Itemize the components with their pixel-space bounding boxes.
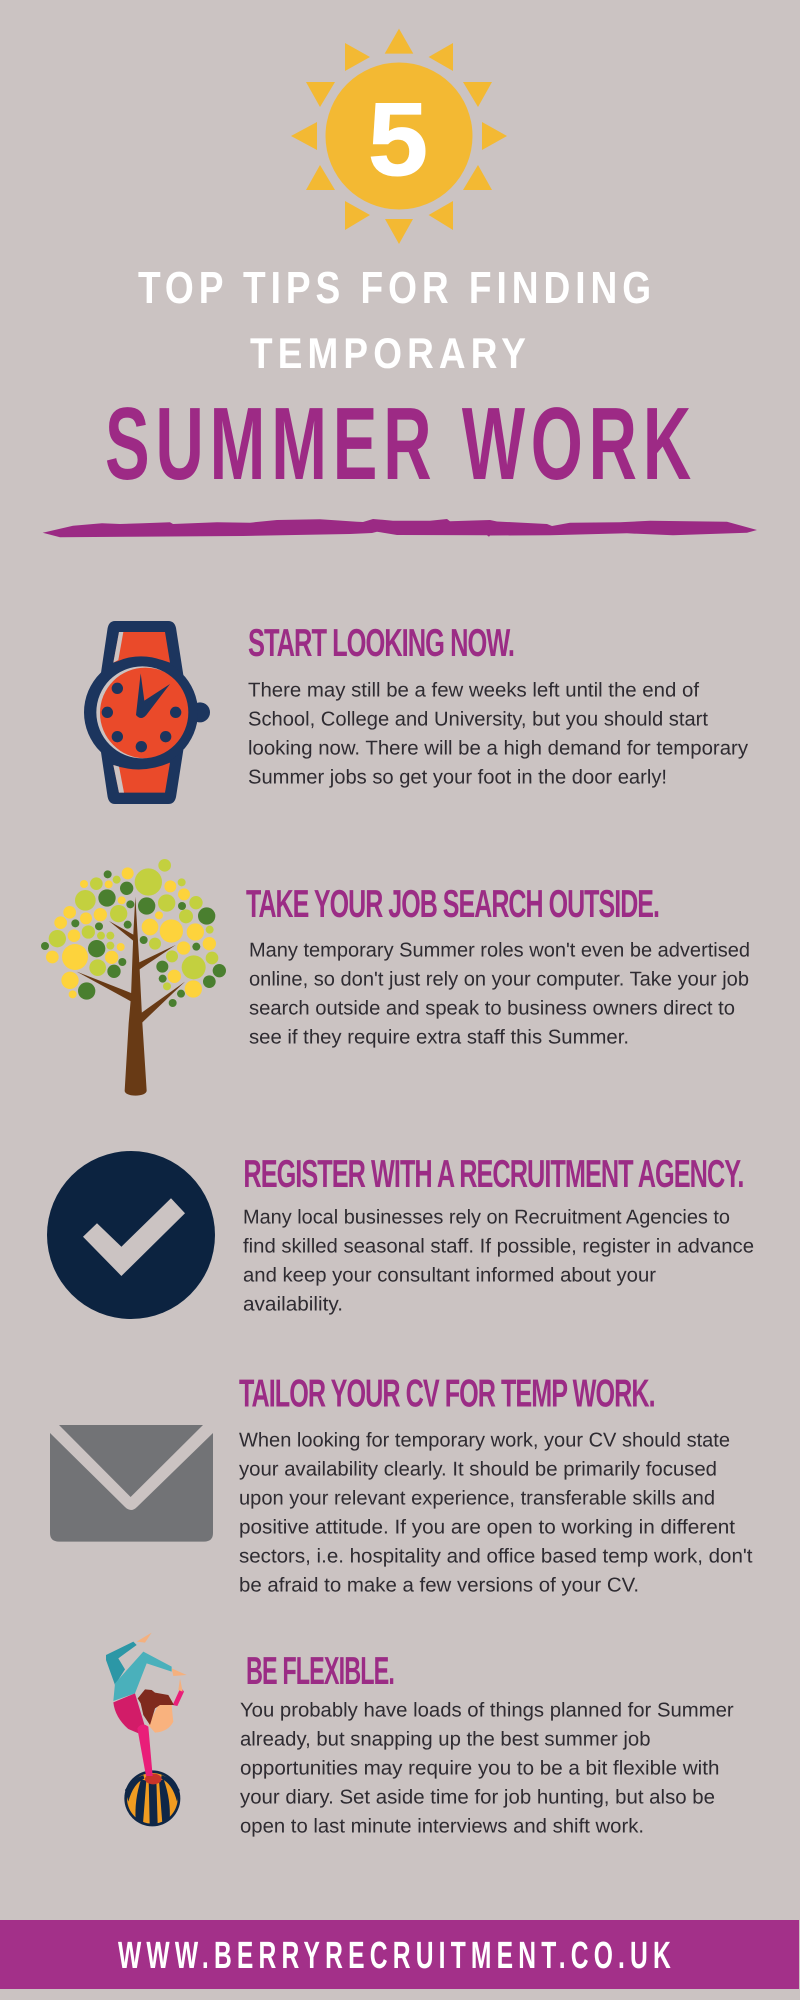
body text: take your job search outside: online, so don't just rely on your computer. Take your job <box>249 969 749 991</box>
icon: check mark circle <box>47 1151 215 1319</box>
panel: start looking now <box>84 621 748 804</box>
title line: top tips for finding: TOP TIPS FOR FINDING <box>138 262 656 313</box>
body text: be flexible: You probably have loads of things planned for Summer <box>240 1700 734 1722</box>
body text: be flexible: open to last minute interviews and shift work. <box>240 1815 644 1837</box>
body text: register with a recruitment agency: availability. <box>243 1293 343 1315</box>
body text: be flexible: opportunities may require you to be a bit flexible with <box>240 1758 719 1780</box>
icon: acrobat balancing on a ball <box>106 1633 187 1826</box>
panel: tailor your cv for temp work <box>50 1373 753 1596</box>
body text: tailor your cv for temp work <box>239 1429 753 1596</box>
icon: sun with number 5: 5 <box>368 82 428 198</box>
body text: start looking now <box>248 680 748 789</box>
body text: register with a recruitment agency: find skilled seasonal staff. If possible, register in advance <box>243 1236 754 1258</box>
panel: register with a recruitment agency <box>47 1151 754 1319</box>
icon: sun with number 5 <box>291 29 507 244</box>
body text: tailor your cv for temp work: positive attitude. If you are open to working in different <box>239 1516 735 1538</box>
body text: start looking now: There may still be a few weeks left until the end of <box>248 680 699 702</box>
title line: temporary: TEMPORARY <box>250 330 531 378</box>
body text: tailor your cv for temp work: When looking for temporary work, your CV should state <box>239 1429 730 1451</box>
icon: envelope <box>50 1425 213 1542</box>
brush stroke underline <box>43 519 757 537</box>
panel: take your job search outside <box>41 859 750 1096</box>
body text: register with a recruitment agency: Many local businesses rely on Recruitment Agencies to <box>243 1207 730 1229</box>
panel: be flexible <box>106 1633 734 1837</box>
body text: register with a recruitment agency <box>243 1207 754 1315</box>
body text: tailor your cv for temp work: your availability clearly. It should be primarily focused <box>239 1458 717 1480</box>
footer band with website <box>0 1920 799 1989</box>
body text: start looking now: School, College and University, but you should start <box>248 709 708 731</box>
heading: start looking now: START LOOKING NOW. <box>248 622 514 665</box>
header: sun, title and brush stroke <box>43 29 757 537</box>
body text: take your job search outside: search outside and speak to business owners direct to <box>249 998 735 1020</box>
body text: be flexible: your diary. Set aside time for job hunting, but also be <box>240 1787 715 1809</box>
heading: be flexible: BE FLEXIBLE. <box>246 1650 394 1693</box>
body text: take your job search outside <box>249 940 750 1048</box>
body text: be flexible <box>240 1700 734 1837</box>
body text: take your job search outside: see if they require extra staff this Summer. <box>249 1026 629 1048</box>
body text: register with a recruitment agency: and keep your consultant informed about your <box>243 1265 656 1287</box>
body text: tailor your cv for temp work: sectors, i.e. hospitality and office based temp work, don't <box>239 1545 753 1567</box>
icon: tree <box>41 859 226 1096</box>
body text: start looking now: Summer jobs so get your foot in the door early! <box>248 767 667 789</box>
body text: tailor your cv for temp work: upon your relevant experience, transferable skills and <box>239 1487 715 1509</box>
body text: be flexible: already, but snapping up the best summer job <box>240 1729 650 1751</box>
body text: take your job search outside: Many temporary Summer roles won't even be advertised <box>249 940 750 962</box>
icon: wristwatch <box>84 621 210 804</box>
body text: start looking now: looking now. There will be a high demand for temporary <box>248 738 748 760</box>
body text: tailor your cv for temp work: be afraid to make a few versions of your CV. <box>239 1574 639 1596</box>
